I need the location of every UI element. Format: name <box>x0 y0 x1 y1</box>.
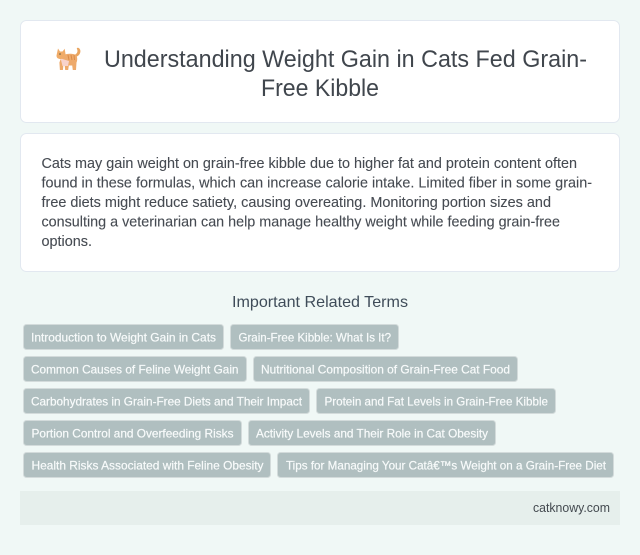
text block: description: options. <box>42 234 92 250</box>
title: Understanding Weight Gain in Cats Fed Grain- <box>104 46 587 73</box>
tag <box>24 356 246 382</box>
tag <box>248 420 496 446</box>
tag <box>24 388 310 414</box>
footer source text: catknowy.com <box>533 500 610 515</box>
tag <box>254 356 518 382</box>
tag <box>24 420 242 446</box>
tag: Grain-Free Kibble: What Is It? <box>238 330 391 344</box>
tag <box>316 388 556 414</box>
tags: related terms <box>24 324 614 478</box>
tag: Tips for Managing Your Catâ€™s Weight on a Grain-Free Diet <box>286 458 607 472</box>
text block: description: found in these formulas, which can increase calorie intake. Limited fiber in some grain- <box>42 176 592 192</box>
text block: description: Cats may gain weight on grain-free kibble due to higher fat and protein content often <box>42 156 577 172</box>
tag: Nutritional Composition of Grain-Free Cat Food <box>261 362 510 376</box>
panel: title card <box>20 20 620 122</box>
text block: description: free diets might reduce satiety, causing overeating. Monitoring portion sizes and <box>42 195 551 211</box>
tag: Health Risks Associated with Feline Obesity <box>32 458 264 472</box>
tag: Portion Control and Overfeeding Risks <box>32 426 234 440</box>
tag <box>278 452 614 478</box>
title <box>104 46 587 102</box>
tag <box>24 324 224 350</box>
tag <box>24 452 270 478</box>
text block: description <box>42 156 592 250</box>
panel: description <box>20 134 620 272</box>
tag: Introduction to Weight Gain in Cats <box>31 330 216 344</box>
tag: Activity Levels and Their Role in Cat Obesity <box>256 426 488 440</box>
footer <box>20 491 620 525</box>
heading: related terms: Important Related Terms <box>232 294 408 311</box>
text block: description: consulting a veterinarian can help manage healthy weight while feeding grain-free <box>42 214 560 230</box>
tag: Protein and Fat Levels in Grain-Free Kibble <box>324 394 548 408</box>
tag: Carbohydrates in Grain-Free Diets and Their Impact <box>31 394 303 408</box>
icon: cat <box>56 48 80 70</box>
tag: Common Causes of Feline Weight Gain <box>31 362 238 376</box>
title: Free Kibble <box>261 75 379 102</box>
tag <box>230 324 398 350</box>
